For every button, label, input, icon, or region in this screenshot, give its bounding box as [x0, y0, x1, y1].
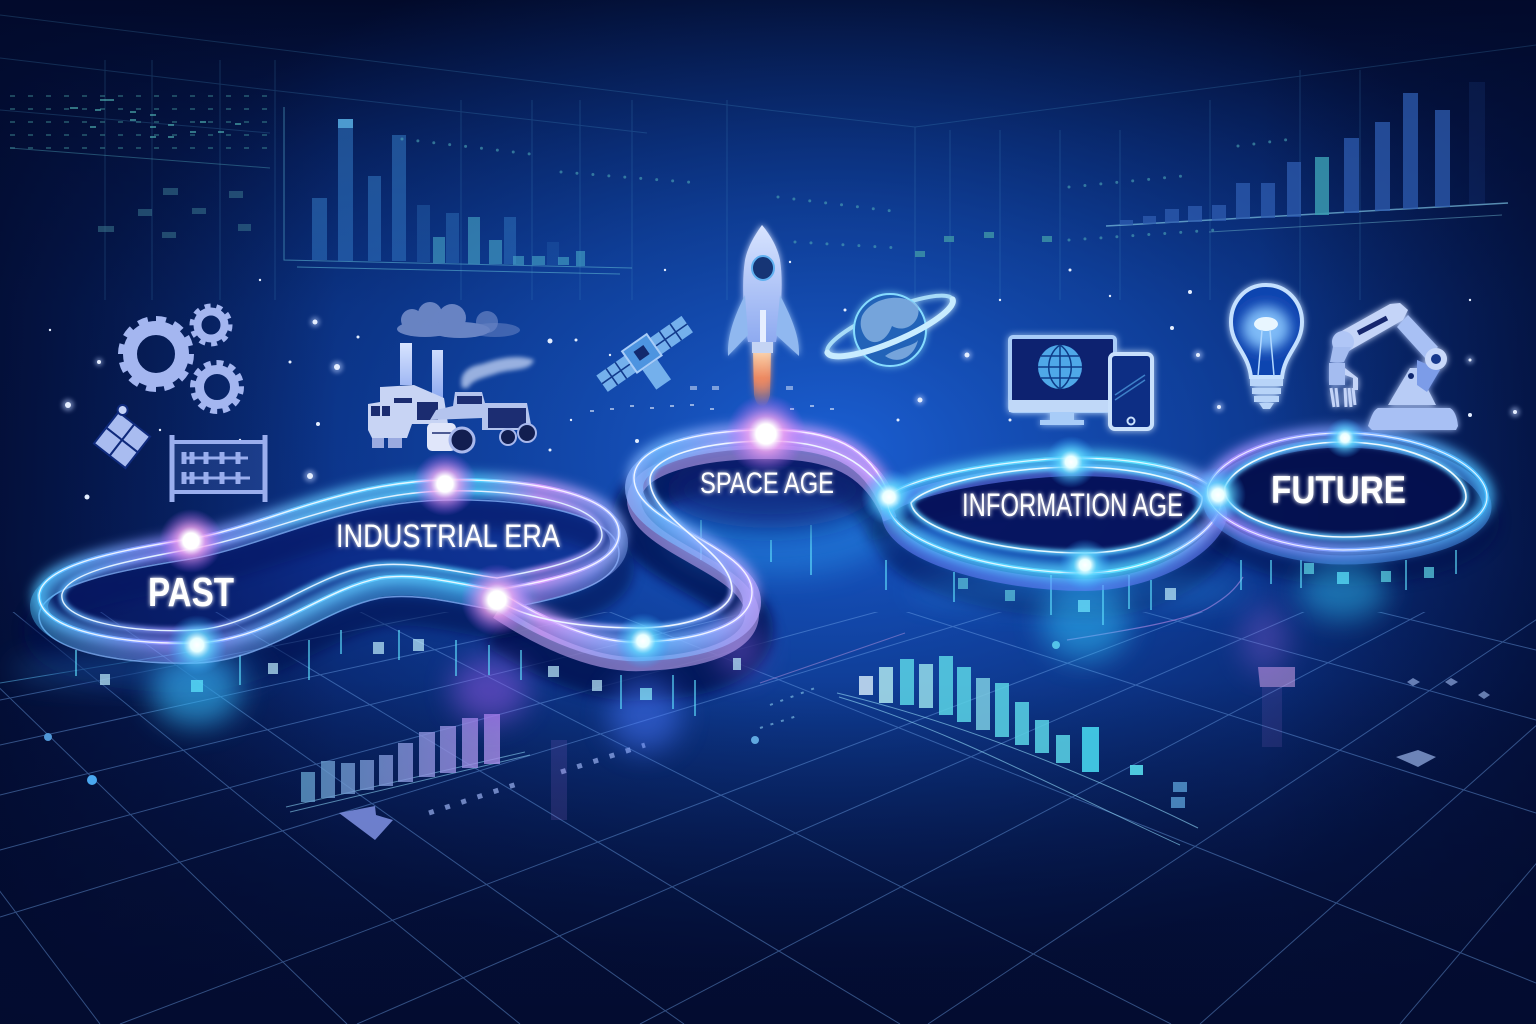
timeline track: past and industrial loop: [39, 480, 619, 663]
icon: clouds: [397, 302, 520, 338]
timeline track: information age loop: [888, 458, 1221, 585]
timeline track: future loop: [1207, 433, 1487, 560]
label: industrial era: INDUSTRIAL ERA: [336, 518, 561, 554]
wall tiles: [915, 232, 1052, 257]
bar chart: top right wall: [1106, 82, 1508, 232]
icon: robot arm: [1329, 303, 1458, 430]
glowing nodes: [159, 394, 1365, 675]
bar chart: floor left: [286, 714, 530, 812]
reflection tiles: [100, 563, 1434, 700]
bar chart: top left wall: [284, 107, 632, 274]
dotted data rows on wall: [402, 139, 1292, 248]
label: future: FUTURE: [1271, 469, 1406, 512]
icon: map parcel: [92, 403, 156, 468]
label: past: PAST: [148, 569, 234, 615]
label: information age: INFORMATION AGE: [962, 487, 1183, 523]
background stars: [49, 261, 1520, 500]
icon: rocket: [728, 225, 799, 406]
icon: abacus: [172, 435, 265, 502]
icon: planet with ring: [821, 285, 959, 367]
icon: monitor and phone: [1009, 337, 1152, 429]
icon: satellite: [593, 312, 708, 413]
bar chart: floor centre: [760, 656, 1198, 845]
floor markers: [0, 577, 1490, 840]
icon: light bulb: [1231, 285, 1302, 409]
data dot matrix top left: [10, 95, 272, 238]
timeline track: s-curve to space age: [497, 430, 890, 664]
ribbon dark base shadows: [39, 457, 1487, 680]
floor glow reflections: [10, 484, 1457, 751]
floor perspective grid: [0, 612, 1536, 1024]
label: space age: SPACE AGE: [700, 467, 834, 500]
icon: factory and tractor: [368, 343, 536, 452]
icon: gears: [122, 306, 241, 411]
wall lines and verticals: [0, 15, 1536, 300]
